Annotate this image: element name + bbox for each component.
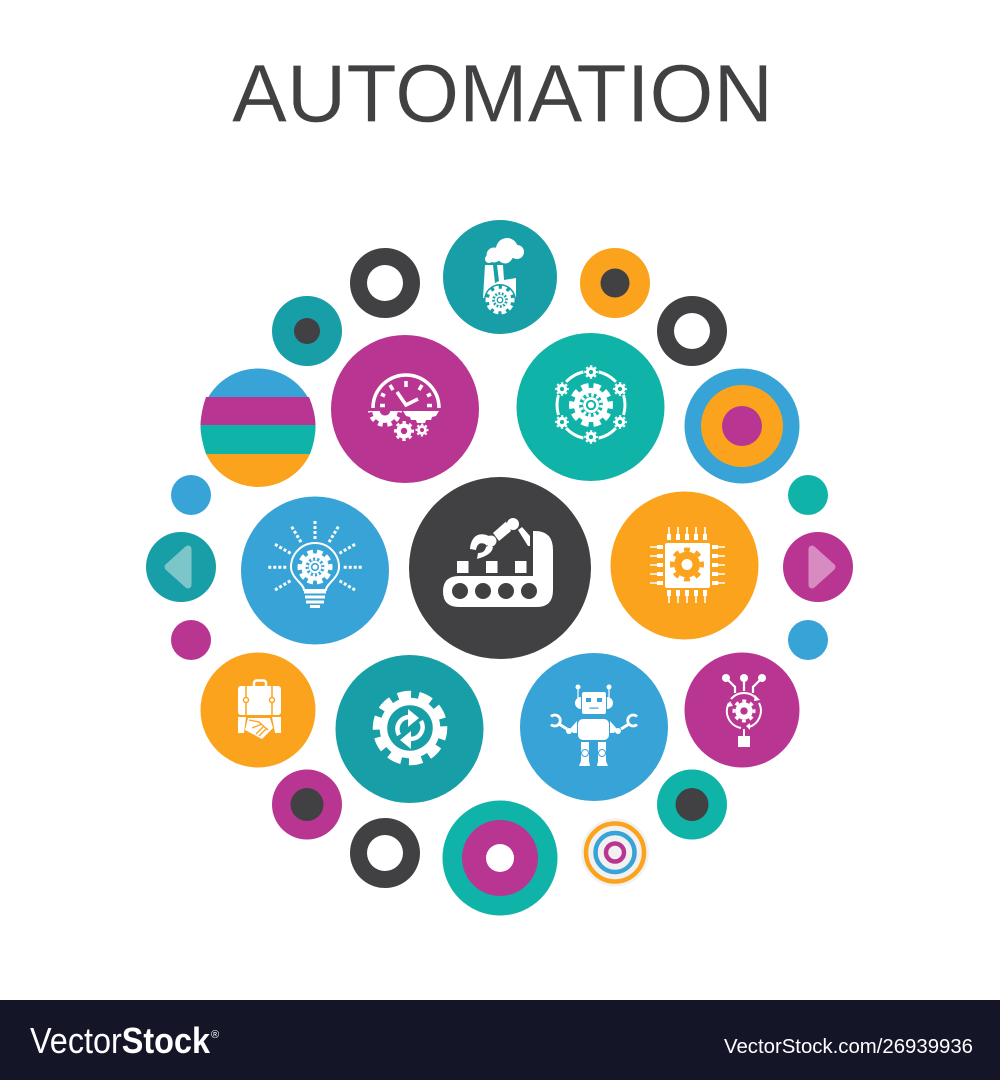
panel: centre conveyor with robot arm <box>409 477 591 659</box>
panel: robot <box>520 653 668 801</box>
icon: robot <box>551 684 637 766</box>
ring: teal with dark dot <box>272 296 342 366</box>
small dot: teal right <box>788 475 828 515</box>
footer image id: VectorStock.com/26939936 <box>724 1035 973 1058</box>
panel: speed gauge and gears <box>331 335 479 483</box>
icon: sync gear <box>372 690 448 766</box>
icon: central gear with satellites <box>556 366 626 443</box>
panel: cpu chip with gear <box>610 492 758 640</box>
registered mark: ® <box>211 1029 219 1041</box>
ring: dark left upper <box>350 248 420 318</box>
striped circle <box>200 368 316 487</box>
icon: sync arrows <box>397 709 423 749</box>
ring: orange with dark dot <box>580 248 650 318</box>
icon: light bulb <box>268 521 362 606</box>
title: AUTOMATION <box>232 48 773 140</box>
icon: dial with gears <box>370 375 439 440</box>
arrow: right <box>783 532 853 602</box>
footer bar <box>0 1000 1000 1080</box>
arrow: left <box>146 532 216 602</box>
concentric circle: blue orange magenta <box>684 368 800 484</box>
icon: cpu chip <box>650 527 725 603</box>
panel: business handshake <box>200 652 316 768</box>
small dot: blue right <box>788 620 828 660</box>
concentric circle: teal magenta white <box>442 800 558 916</box>
target rings <box>581 818 649 886</box>
footer logo: VectorStock <box>30 1020 211 1061</box>
icon: conveyor belt <box>443 518 553 607</box>
panel: gear with sync arrows <box>336 655 484 803</box>
panel: gears network <box>516 333 664 481</box>
small dot: magenta left <box>171 620 211 660</box>
panel: process gear with inputs <box>684 652 800 768</box>
ring: dark right upper <box>657 296 727 366</box>
icon: briefcase and handshake <box>238 680 281 739</box>
panel: idea bulb with gear <box>241 496 389 644</box>
small dot: blue left <box>171 475 211 515</box>
ring: magenta with dark dot <box>272 770 342 840</box>
ring: dark lower left <box>350 818 420 888</box>
ring: teal with dark dot lower right <box>657 770 727 840</box>
panel: factory gear <box>443 220 557 334</box>
icon: inputs, process, output <box>722 674 766 747</box>
icon: factory with smoke and gear <box>483 238 524 316</box>
